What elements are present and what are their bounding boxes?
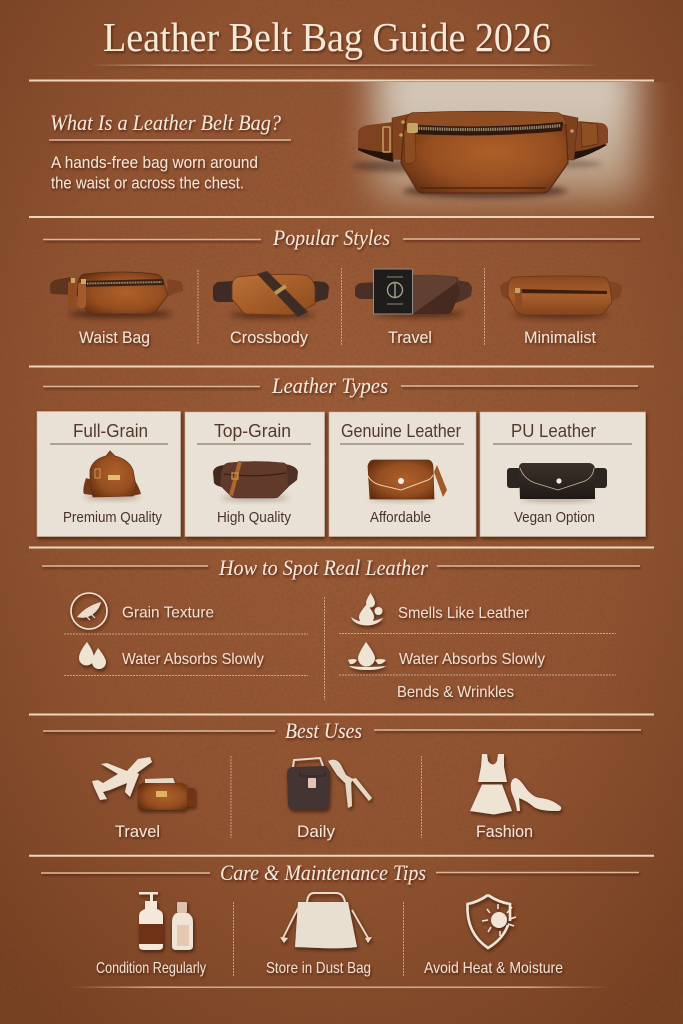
icon: water on leather bbox=[348, 642, 386, 670]
bag: crossbody bbox=[213, 271, 329, 318]
hero heading: What Is a Leather Belt Bag? bbox=[50, 110, 281, 135]
hero description bbox=[51, 153, 258, 192]
icon: tan backpack bbox=[83, 451, 141, 500]
card: full-grain bbox=[37, 412, 180, 536]
section rules bbox=[29, 80, 654, 856]
panel: popular styles bbox=[50, 268, 622, 347]
label: Waist Bag bbox=[79, 328, 150, 347]
label: Travel bbox=[115, 822, 160, 841]
card: genuine leather bbox=[329, 412, 476, 536]
icon: water drops bbox=[79, 642, 106, 669]
icon: heat shield bbox=[467, 895, 516, 948]
label: Fashion bbox=[476, 822, 533, 841]
panel: how to spot real leather bbox=[64, 593, 616, 701]
card: genuine leather: Genuine Leather bbox=[341, 421, 461, 441]
bag: travel with passport bbox=[355, 269, 472, 318]
section heading: popular styles: Popular Styles bbox=[272, 225, 390, 250]
card: pu leather bbox=[480, 412, 646, 536]
hero description: the waist or across the chest. bbox=[51, 174, 244, 192]
hero bag illustration bbox=[352, 112, 608, 198]
hero spotlight bbox=[375, 55, 637, 200]
text: water absorbs slowly right: Water Absorbs Slowly bbox=[399, 651, 545, 668]
panel: what is a leather belt bag bbox=[49, 55, 637, 200]
icon: tan flap bag bbox=[368, 460, 447, 500]
icon: smell drops bbox=[351, 593, 383, 626]
card: full-grain: Full-Grain bbox=[73, 421, 148, 441]
section heading: leather types: Leather Types bbox=[271, 373, 388, 398]
text: water absorbs slowly left: Water Absorbs Slowly bbox=[122, 651, 264, 668]
label: Crossbody bbox=[230, 328, 308, 347]
card: pu leather: PU Leather bbox=[511, 421, 596, 441]
icon: grain texture bbox=[71, 593, 107, 629]
label: Store in Dust Bag bbox=[266, 960, 371, 977]
title: Leather Belt Bag Guide 2026 bbox=[103, 14, 551, 60]
label: Travel bbox=[388, 328, 432, 347]
icon: black pu bag bbox=[507, 463, 607, 502]
text: grain texture: Grain Texture bbox=[122, 604, 214, 622]
panel: leather types bbox=[37, 412, 646, 536]
panel: care and maintenance tips bbox=[96, 892, 563, 977]
card: pu leather: Vegan Option bbox=[514, 509, 595, 526]
icon: dress and heel bbox=[470, 754, 561, 814]
hero description: A hands-free bag worn around bbox=[51, 153, 258, 172]
icon: airplane with bag bbox=[92, 757, 195, 810]
label: Minimalist bbox=[524, 328, 596, 347]
icon: dust bag bbox=[280, 893, 372, 948]
bottom divider bbox=[70, 986, 610, 988]
section heading: best uses: Best Uses bbox=[285, 718, 362, 743]
icon: brown belt bag bbox=[213, 461, 298, 500]
card: top-grain: Top-Grain bbox=[214, 421, 291, 441]
panel: best uses bbox=[92, 754, 561, 841]
icon: conditioner bottles bbox=[139, 892, 193, 950]
card: full-grain: Premium Quality bbox=[63, 509, 162, 526]
label: Condition Regularly bbox=[96, 960, 206, 977]
card: top-grain: High Quality bbox=[217, 509, 291, 526]
text: smells like leather: Smells Like Leather bbox=[398, 605, 530, 622]
bag: waist bag bbox=[50, 272, 183, 318]
section heading: care and maintenance tips: Care & Maintenance Tips bbox=[220, 860, 426, 885]
text: bends and wrinkles: Bends & Wrinkles bbox=[397, 684, 514, 701]
label: Daily bbox=[297, 822, 335, 841]
bag: minimalist bbox=[500, 276, 622, 318]
card: top-grain bbox=[185, 412, 324, 536]
icon: daily bag with keys bbox=[287, 758, 372, 810]
section heading: how to spot real leather: How to Spot Real Leather bbox=[218, 555, 428, 580]
card: genuine leather: Affordable bbox=[370, 509, 431, 526]
label: Avoid Heat & Moisture bbox=[424, 960, 563, 977]
